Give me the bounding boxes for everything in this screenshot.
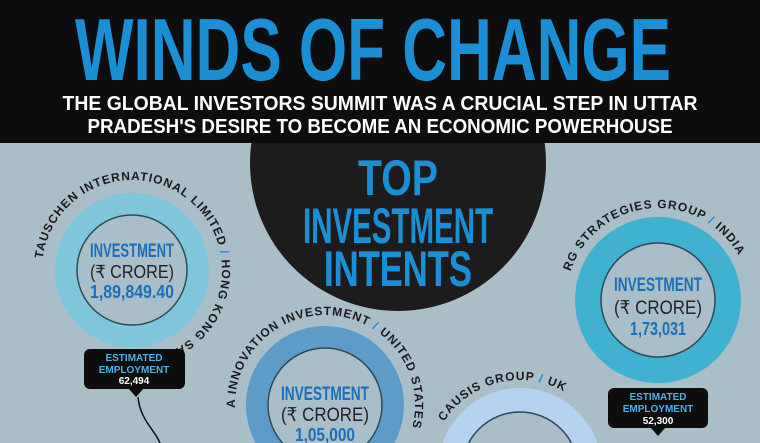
circle lower part over band edge <box>260 143 536 238</box>
ring: Tauschen: 1,89,849.40 <box>90 282 174 302</box>
ring: Innovation Investment: (₹ CRORE) <box>281 405 369 426</box>
header band <box>0 0 760 143</box>
callout: employment 62,494: ESTIMATED <box>105 353 163 364</box>
subtitle <box>62 93 698 138</box>
callout: employment 52,300: 52,300 <box>643 416 674 427</box>
ring: Innovation Investment <box>226 306 424 443</box>
ring: RG Strategies: 1,73,031 <box>630 319 686 339</box>
ring: RG Strategies <box>563 200 744 383</box>
circle title text (redrawn above band) <box>303 150 493 297</box>
subtitle: PRADESH'S DESIRE TO BECOME AN ECONOMIC POWERHOUSE <box>88 116 672 138</box>
black circle: top investment intents: TOP <box>358 150 438 206</box>
ring: Tauschen: TAUSCHEN INTERNATIONAL LIMITED / HONG KONG SAR <box>34 172 230 352</box>
ring: Tauschen: INVESTMENT <box>90 241 174 262</box>
circle title text (redrawn above band): TOP <box>358 150 438 206</box>
black circle: top investment intents <box>250 15 546 311</box>
ring: Causis Group: CAUSIS GROUP / UK <box>438 372 567 420</box>
callout: employment 62,494: EMPLOYMENT <box>99 365 169 376</box>
callout: employment 62,494 <box>84 349 185 443</box>
ring: RG Strategies: RG STRATEGIES GROUP / INDIA <box>563 200 744 271</box>
black circle: top investment intents: INTENTS <box>324 241 472 297</box>
ring: Causis Group <box>438 372 598 443</box>
callout: employment 52,300: ESTIMATED <box>629 392 687 403</box>
black circle: top investment intents: INVESTMENT <box>303 198 493 254</box>
callout: employment 52,300: EMPLOYMENT <box>623 404 693 415</box>
ring: RG Strategies: (₹ CRORE) <box>614 298 702 319</box>
callout: employment 62,494: 62,494 <box>119 376 150 387</box>
ring: Innovation Investment: INVESTMENT <box>281 384 369 405</box>
ring: Tauschen: (₹ CRORE) <box>90 262 174 282</box>
circle title text (redrawn above band): INTENTS <box>324 241 472 297</box>
subtitle: THE GLOBAL INVESTORS SUMMIT WAS A CRUCIAL STEP IN UTTAR <box>62 93 698 115</box>
ring: RG Strategies: INVESTMENT <box>614 275 702 296</box>
callout: employment 52,300 <box>608 388 708 436</box>
circle title text (redrawn above band): INVESTMENT <box>303 198 493 254</box>
